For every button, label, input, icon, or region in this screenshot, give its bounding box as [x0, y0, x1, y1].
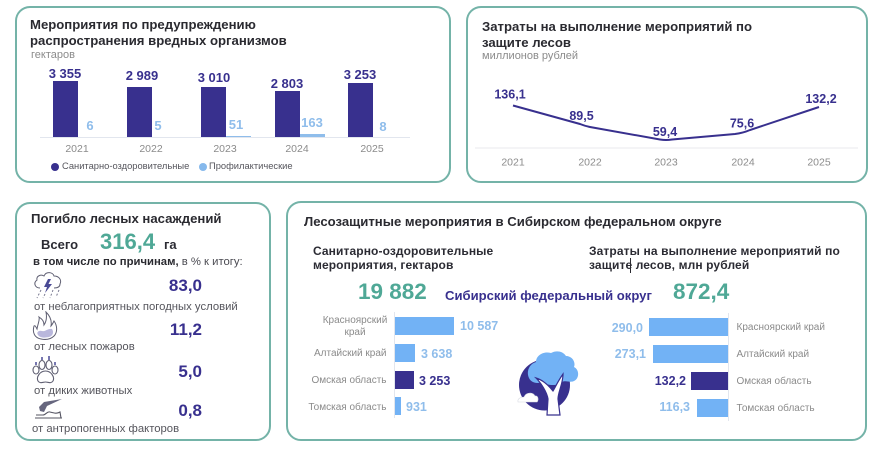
- line chart: costs by year: 75,6: [730, 116, 754, 130]
- line chart: costs by year: 89,5: [569, 109, 594, 123]
- line chart: costs by year: [475, 88, 858, 168]
- cause value: anthropogenic: 0,8: [178, 401, 202, 420]
- line chart: costs by year: 2023: [654, 156, 678, 168]
- bar chart: hectares by year: 2 803: [271, 76, 303, 91]
- total label: Всего: [41, 237, 78, 252]
- bar chart: hectares by year: 5: [154, 118, 162, 133]
- heading: preventive measures: Мероприятия по предупреждению: [30, 17, 256, 32]
- bar chart: costs by region: 273,1: [615, 347, 646, 361]
- line chart: costs by year: 2025: [807, 156, 831, 168]
- legend: bar series: Санитарно-оздоровительные: [62, 161, 189, 171]
- icon: human factor: [35, 399, 62, 418]
- bar chart: hectares by region: 931: [406, 400, 427, 414]
- unit label: hectares: гектаров: [31, 49, 75, 61]
- line chart: costs by year: 2022: [578, 156, 602, 168]
- bar chart: hectares by year: 51: [229, 117, 243, 132]
- icon: animal paw: [32, 356, 58, 384]
- bar chart: hectares by year: 3 253: [344, 67, 376, 82]
- causes caption: в том числе по причинам, в % к итогу:: [33, 256, 243, 268]
- label: Siberian federal district: Сибирский федеральный округ: [445, 288, 652, 303]
- bar chart: costs by region: Омская область: [736, 376, 812, 387]
- total value: 316,4: [100, 229, 155, 254]
- bar chart: costs by region: 132,2: [655, 374, 686, 388]
- bar chart: hectares by year: 2021: [65, 143, 89, 155]
- bar chart: hectares by year: 6: [86, 118, 94, 133]
- bar chart: costs by region: Алтайский край: [736, 349, 809, 360]
- bar chart: hectares by year: 3 010: [198, 70, 230, 85]
- heading: costs of forest protection: [482, 18, 752, 50]
- total: sanitary hectares: 19 882: [358, 279, 427, 304]
- bar chart: hectares by region: 10 587: [460, 319, 498, 333]
- heading: forest losses: Погибло лесных насаждений: [31, 211, 221, 226]
- line chart: costs by year: 2021: [501, 156, 525, 168]
- heading: costs of forest protection: Затраты на выполнение мероприятий по: [482, 18, 752, 34]
- bar chart: hectares by year: 3 355: [49, 66, 81, 81]
- bar chart: hectares by region: 3 638: [421, 347, 452, 361]
- heading: preventive measures: распространения вредных организмов: [30, 33, 287, 48]
- line chart: costs by year: 136,1: [494, 88, 526, 102]
- bar chart: hectares by year: 2022: [139, 143, 163, 155]
- heading: preventive measures: [30, 17, 287, 48]
- bar chart: costs by region: Томская область: [736, 403, 815, 414]
- line chart: costs by year: 2024: [731, 156, 755, 168]
- line chart: costs by year: 132,2: [805, 92, 837, 106]
- total unit: га: [164, 237, 177, 252]
- bar chart: hectares by year: 2025: [360, 143, 384, 155]
- panel: preventive measures bar chart: [15, 6, 451, 183]
- subheading: sanitary measures: [313, 244, 493, 272]
- subheading: sanitary measures: Санитарно-оздоровительные: [313, 244, 493, 258]
- cause value: fires: 11,2: [170, 320, 202, 339]
- bar chart: hectares by region: Красноярский: [323, 315, 387, 326]
- panel: Siberian federal district: [286, 201, 867, 441]
- cause value: weather: 83,0: [169, 276, 202, 295]
- bar chart: hectares by year: 163: [301, 115, 323, 130]
- bar chart: costs by region: Красноярский край: [736, 322, 825, 333]
- line chart: costs by year: 59,4: [653, 125, 677, 139]
- subheading: costs: Затраты на выполнение мероприятий по: [589, 244, 840, 258]
- icon: tree: [518, 351, 578, 416]
- bar chart: hectares by year: [40, 66, 410, 155]
- cause label: weather: от неблагоприятных погодных условий: [34, 301, 238, 313]
- bar chart: costs by region: 290,0: [612, 320, 643, 334]
- cause label: anthropogenic: от антропогенных факторов: [32, 423, 179, 435]
- panel: costs line chart: [466, 6, 868, 183]
- legend: bar series: Профилактические: [209, 161, 293, 171]
- subheading: costs: [589, 244, 840, 272]
- bar chart: costs by region: [612, 313, 825, 421]
- icon: storm cloud: [34, 272, 62, 298]
- bar chart: costs by region: 116,3: [659, 400, 690, 414]
- bar chart: hectares by region: Алтайский край: [314, 348, 386, 359]
- bar chart: hectares by region: Омская область: [311, 375, 386, 386]
- bar chart: hectares by year: 8: [379, 119, 387, 134]
- panel: forest losses: [15, 202, 271, 441]
- bar chart: hectares by year: 2023: [213, 143, 237, 155]
- subheading: costs: защите лесов, млн рублей: [589, 258, 749, 272]
- cause label: animals: от диких животных: [34, 385, 132, 397]
- unit label: million rubles: миллионов рублей: [482, 50, 578, 62]
- bar chart: hectares by year: 2 989: [126, 68, 158, 83]
- bar chart: hectares by region: Томская область: [308, 402, 386, 413]
- bar chart: hectares by region: край: [344, 327, 366, 338]
- legend: bar series: [51, 161, 293, 171]
- bar chart: hectares by region: 3 253: [419, 374, 450, 388]
- bar chart: hectares by region: [308, 312, 498, 418]
- text cursor mark: [630, 258, 631, 273]
- bar chart: hectares by year: 2024: [285, 143, 309, 155]
- cause value: animals: 5,0: [178, 362, 202, 381]
- icon: fire: [32, 311, 58, 340]
- subheading: sanitary measures: мероприятия, гектаров: [313, 258, 453, 272]
- total: costs: 872,4: [673, 279, 729, 304]
- cause label: fires: от лесных пожаров: [34, 341, 135, 353]
- heading: costs of forest protection: защите лесов: [482, 34, 571, 50]
- heading: Siberian district measures: Лесозащитные мероприятия в Сибирском федеральном округе: [304, 214, 722, 229]
